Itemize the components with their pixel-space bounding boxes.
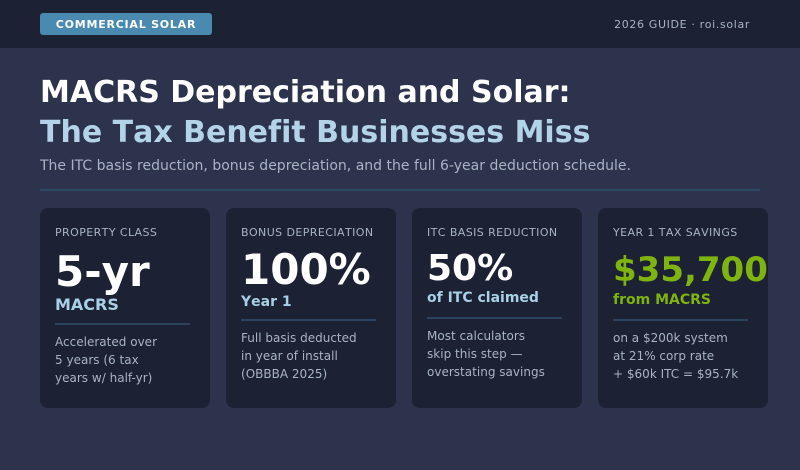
note: Most calculators bbox=[427, 329, 525, 343]
note: + $60k ITC = $95.7k bbox=[613, 367, 738, 381]
value: 5-yr bbox=[55, 247, 150, 296]
panel: ITC basis reduction bbox=[412, 208, 582, 408]
note bbox=[613, 331, 738, 381]
note: Full basis deducted bbox=[241, 331, 357, 345]
note: in year of install bbox=[241, 349, 338, 363]
panel: bonus depreciation bbox=[226, 208, 396, 408]
label: YEAR 1 TAX SAVINGS bbox=[613, 226, 738, 239]
note: on a $200k system bbox=[613, 331, 728, 345]
note: (OBBBA 2025) bbox=[241, 367, 327, 381]
badge: commercial solar: COMMERCIAL SOLAR bbox=[56, 18, 196, 31]
panel: property class bbox=[40, 208, 210, 408]
note: Accelerated over bbox=[55, 335, 157, 349]
subtitle: The ITC basis reduction, bonus depreciation, and the full 6-year deduction schedule. bbox=[40, 158, 631, 174]
note: overstating savings bbox=[427, 365, 545, 379]
note: 5 years (6 tax bbox=[55, 353, 139, 367]
note bbox=[427, 329, 545, 379]
title: MACRS Depreciation and Solar: bbox=[40, 75, 571, 110]
unit: MACRS bbox=[55, 295, 119, 314]
title: The Tax Benefit Businesses Miss bbox=[40, 115, 590, 150]
value: 50% bbox=[427, 248, 513, 289]
panel: year 1 tax savings bbox=[598, 208, 768, 408]
unit: from MACRS bbox=[613, 292, 711, 308]
header divider bbox=[40, 189, 760, 191]
top header bar bbox=[0, 0, 800, 48]
guide label: 2026 GUIDE · roi.solar bbox=[614, 18, 750, 31]
note bbox=[241, 331, 357, 381]
note bbox=[55, 335, 158, 385]
title bbox=[40, 75, 590, 150]
unit: of ITC claimed bbox=[427, 290, 539, 306]
label: BONUS DEPRECIATION bbox=[241, 226, 373, 239]
badge: commercial solar bbox=[40, 13, 212, 35]
unit: Year 1 bbox=[241, 294, 292, 310]
value: $35,700 bbox=[613, 250, 768, 290]
value: 100% bbox=[241, 245, 371, 294]
note: years w/ half-yr) bbox=[55, 371, 152, 385]
note: skip this step — bbox=[427, 347, 523, 361]
label: PROPERTY CLASS bbox=[55, 226, 157, 239]
label: ITC BASIS REDUCTION bbox=[427, 226, 558, 239]
note: at 21% corp rate bbox=[613, 349, 714, 363]
